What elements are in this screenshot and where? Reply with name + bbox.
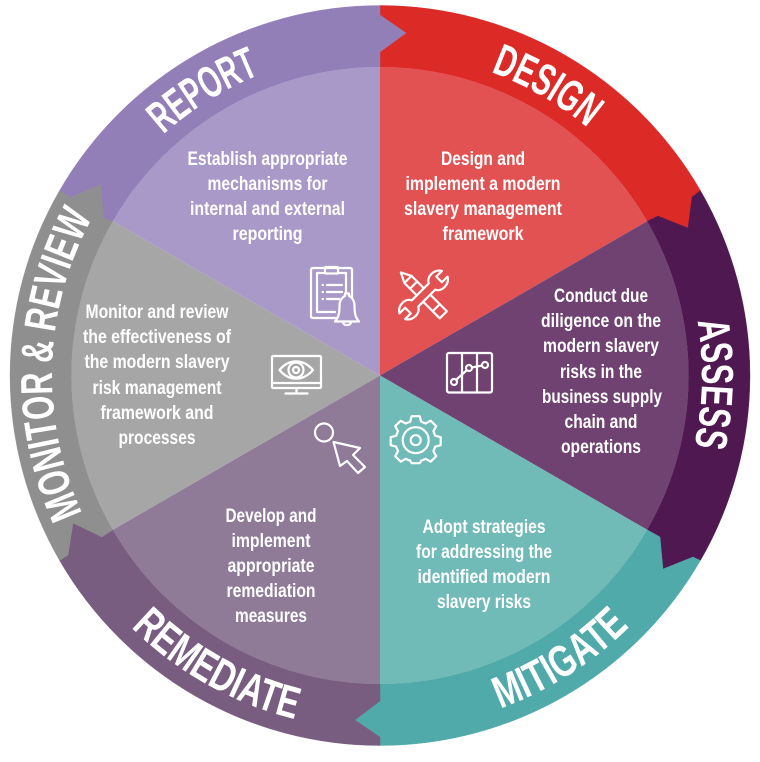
panel: mitigate — [355, 376, 700, 746]
text: remediate description: measures — [235, 605, 307, 627]
icon: monitor with eye — [272, 356, 321, 394]
mitigate wedge — [380, 376, 647, 684]
icon: clipboard and bell — [311, 267, 359, 325]
text: mitigate description — [416, 516, 552, 613]
text: assess description: chain and — [564, 411, 638, 433]
text: assess description: operations — [561, 436, 641, 458]
text: assess description: Conduct due — [554, 285, 648, 307]
report wedge — [113, 67, 380, 375]
panel: monitor and review — [10, 184, 380, 560]
monitor ribbon — [10, 184, 113, 560]
monitor wedge — [71, 221, 380, 530]
text: assess description: modern slavery — [543, 335, 659, 357]
text: mitigate description: identified modern — [418, 566, 550, 588]
text: monitor description: the effectiveness of — [83, 326, 231, 348]
text: mitigate description: Adopt strategies — [422, 516, 546, 538]
text: monitor description: processes — [118, 427, 196, 449]
heading: assess: ASSESS — [696, 322, 734, 449]
text: monitor description: risk management — [92, 377, 222, 399]
text: design description: Design and — [441, 148, 525, 170]
text: monitor description: the modern slavery — [84, 351, 230, 373]
text: remediate description: implement — [232, 530, 311, 552]
heading: design: DESIGN — [492, 44, 605, 126]
panel: remediate — [60, 376, 380, 746]
text: design description: implement a modern — [406, 173, 560, 195]
report ribbon — [60, 6, 406, 221]
text: mitigate description: for addressing the — [416, 541, 552, 563]
text: assess description: diligence on the — [541, 310, 661, 332]
panel: report — [60, 5, 406, 376]
text: mitigate description: slavery risks — [437, 591, 531, 613]
panel: design — [380, 5, 700, 376]
design ribbon — [380, 6, 700, 228]
mitigate ribbon — [355, 530, 700, 746]
text: remediate description: Develop and — [226, 505, 316, 527]
icon: gear — [391, 416, 441, 463]
assess ribbon — [647, 190, 750, 569]
assess wedge — [380, 221, 689, 530]
heading: remediate: REMEDIATE — [132, 606, 302, 719]
text: remediate description: appropriate — [228, 555, 315, 577]
text: report description: reporting — [232, 223, 302, 245]
text: remediate description — [226, 505, 316, 627]
heading: report: REPORT — [144, 46, 254, 134]
text: report description: mechanisms for — [208, 173, 328, 195]
text: design description: framework — [442, 223, 524, 245]
text: monitor description: framework and — [100, 402, 214, 424]
heading: mitigate: MITIGATE — [490, 606, 629, 708]
heading: monitor and review: MONITOR & REVIEW — [21, 204, 90, 524]
text: remediate description: remediation — [226, 580, 316, 602]
text: report description: internal and external — [190, 198, 345, 220]
text: monitor description — [83, 301, 231, 449]
design wedge — [380, 67, 647, 375]
text: assess description — [541, 285, 662, 458]
icon: line chart — [447, 353, 492, 392]
text: assess description: risks in the — [560, 361, 642, 383]
panel: assess — [380, 190, 750, 569]
text: assess description: business supply — [542, 386, 662, 408]
text: design description — [404, 148, 562, 245]
remediate ribbon — [60, 523, 380, 746]
icon: pencil and wrench — [396, 267, 451, 323]
text: design description: slavery management — [404, 198, 562, 220]
text: monitor description: Monitor and review — [86, 301, 229, 323]
icon: cursor and circle — [315, 424, 365, 473]
remediate wedge — [113, 376, 380, 684]
text: report description — [188, 148, 348, 245]
text: report description: Establish appropriate — [188, 148, 348, 170]
